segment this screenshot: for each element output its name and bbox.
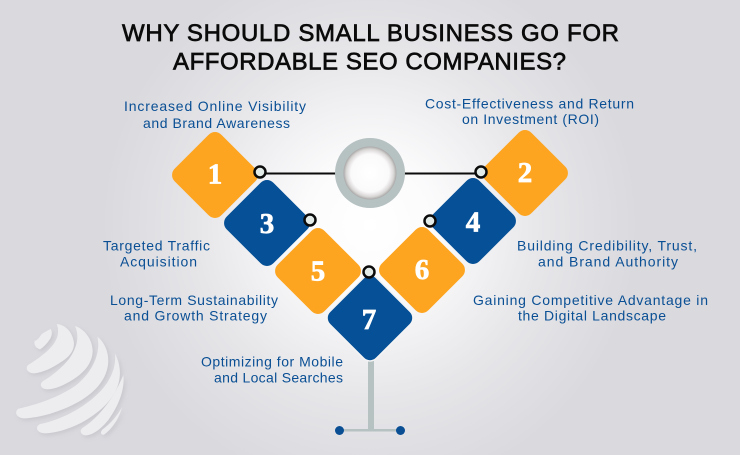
diamond 1 [168, 128, 262, 222]
diamond 7: 7 [362, 304, 376, 336]
label 5: Long-Term Sustainability [110, 292, 278, 308]
node markers [254, 166, 486, 278]
label 7 [201, 354, 343, 386]
diamond 2: 2 [518, 157, 532, 189]
diamond 2 [478, 126, 572, 220]
diamond 4: 4 [466, 206, 480, 238]
diamond 1: 1 [208, 158, 222, 190]
title: WHY SHOULD SMALL BUSINESS GO FOR [122, 20, 619, 47]
diamond 3 [220, 176, 314, 270]
diamond 5 [271, 224, 365, 318]
label 6: the Digital Landscape [518, 308, 666, 324]
label 3: Acquisition [120, 254, 197, 270]
connector: horizontal line [260, 172, 481, 174]
label 4 [517, 238, 697, 270]
label 7: Optimizing for Mobile [201, 354, 343, 370]
diamond 6: 6 [415, 254, 429, 286]
diamond 7 [323, 271, 417, 365]
label 2: on Investment (ROI) [462, 111, 599, 127]
diamond 3: 3 [260, 208, 274, 240]
center circle [335, 138, 405, 208]
label 6: Gaining Competitive Advantage in [473, 292, 708, 308]
diamond 4 [426, 174, 520, 268]
label 4: Building Credibility, Trust, [517, 238, 697, 254]
title: AFFORDABLE SEO COMPANIES? [173, 48, 566, 76]
label 7: and Local Searches [214, 370, 343, 386]
label 5: and Growth Strategy [124, 308, 267, 324]
label 1: and Brand Awareness [143, 115, 290, 131]
diamond 5: 5 [311, 256, 325, 288]
label 2 [425, 96, 634, 127]
label 1: Increased Online Visibility [124, 98, 306, 114]
label 4: and Brand Authority [538, 254, 678, 270]
label 2: Cost-Effectiveness and Return [425, 96, 634, 112]
diamond 6 [375, 223, 469, 317]
label 3 [103, 238, 210, 270]
title [122, 20, 619, 76]
stand [335, 358, 405, 435]
label 1 [124, 98, 306, 131]
label 5 [110, 292, 278, 324]
label 6 [473, 292, 708, 324]
globe watermark [16, 324, 124, 435]
label 3: Targeted Traffic [103, 238, 210, 254]
